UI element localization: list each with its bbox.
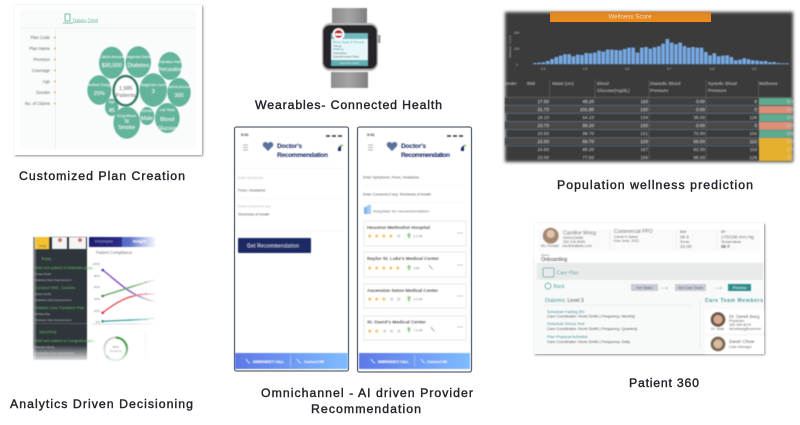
left task sidebar: Grace Smith (35, 272, 51, 276)
histogram: 0.9 (752, 67, 757, 71)
histogram (508, 31, 787, 71)
patient header: Score (680, 240, 689, 244)
top tabs (52, 237, 155, 249)
data table (505, 79, 794, 161)
bubble chart: 1,985 (119, 86, 133, 92)
app header (368, 142, 466, 159)
data table: 88.00 (694, 155, 705, 160)
bubble chart: Smoke (118, 125, 135, 131)
care team members: Physician (729, 319, 744, 323)
status bar: 9:41 (241, 133, 249, 137)
bubble chart: N (125, 119, 129, 125)
patient compliance line chart: 80% (94, 274, 100, 278)
data table: 101.80 (580, 107, 594, 112)
watch screen: Walking (333, 47, 344, 51)
left task sidebar: Congestive Care Improvement (35, 351, 74, 355)
footer call bar (359, 353, 470, 369)
bubble chart: Claims Amount (167, 85, 191, 89)
status bar: 9:41 (367, 133, 375, 137)
care team members: derekbarg@carenet (729, 327, 761, 331)
filter list: Age (43, 79, 51, 84)
data table: 62.00 (694, 147, 705, 152)
hospital card: Houston Methodist: Houston Methodist Hospital (367, 225, 430, 231)
hospital card: St. David's: 7.4 Mi (414, 328, 422, 332)
care team members: Sarah Chow (729, 339, 755, 344)
back button and steps: ---> (715, 286, 722, 290)
left task sidebar: Visit new patient in Congestive pro... (35, 339, 96, 343)
watch strap (331, 8, 368, 88)
data table: 86.20 (582, 147, 594, 152)
patient header (538, 228, 760, 252)
patient header: caroline@abc.com (562, 244, 592, 248)
data table: 0.00 (696, 123, 705, 128)
bubble chart: Precaution (157, 67, 183, 73)
symptom form: Enter Symptoms (238, 176, 263, 180)
icon: cohort (63, 14, 73, 23)
watch screen: View Reminder (339, 61, 360, 65)
histogram: 0 (516, 63, 518, 67)
symptom form: Enter Concerns if any (238, 204, 271, 208)
patient header: 24.00 (680, 244, 692, 249)
data table: 99.70 (582, 131, 594, 136)
data table: 18.10 (538, 115, 549, 120)
patient compliance line chart: 40% (94, 297, 100, 301)
patient header: BMI (680, 230, 686, 234)
diabetes task list: Schedule Fasting BS (547, 309, 585, 314)
left task sidebar: Caroline Wong (35, 345, 54, 349)
data table: 128 (749, 155, 757, 160)
data table: Pressure (650, 88, 669, 93)
back button and steps: ---> (661, 286, 668, 290)
bubble chart: Gender (141, 109, 154, 113)
data table: ender (505, 81, 517, 86)
patient header: Caroline Wong (563, 230, 596, 236)
bubble chart: Medical Charge (87, 83, 112, 87)
data table: 116 (641, 99, 648, 104)
label: customized plan creation: Customized Plan Creation (19, 169, 185, 183)
bubble chart: 3 (152, 89, 155, 95)
hospital card: Houston Methodist: 2.3 Mi (414, 234, 422, 238)
left task sidebar (33, 237, 96, 360)
app header: Recommendation (277, 152, 328, 159)
hospital card: St. David's: St. David's Medical Center (367, 320, 426, 326)
data table: 60.00 (694, 139, 705, 144)
back button and steps: Preview (733, 286, 747, 290)
label: omnichannel provider recommendation: Recommendation (311, 402, 421, 416)
data table: Diastolic Blood (650, 81, 681, 86)
status bar (367, 133, 463, 137)
data table: 77.50 (582, 155, 594, 160)
footer call bar (235, 353, 348, 369)
data table: 89.70 (582, 139, 594, 144)
watch screen (331, 28, 368, 66)
histogram: Wellness - Count (508, 35, 512, 58)
bubble chart: Medication Name (156, 60, 184, 64)
data table: 0.00 (696, 107, 705, 112)
app header: Doctor's (277, 143, 302, 150)
filter list: Plan Code (30, 35, 51, 40)
status onboarding: Onboarding (541, 257, 567, 263)
bubble chart: Claims Amount (100, 55, 124, 59)
bubble chart: Male (141, 116, 153, 122)
donut gauge (104, 331, 146, 360)
data table: 134 (640, 115, 648, 120)
patient header: 170/100 mm Hg (721, 234, 754, 240)
watch screen: Blood Sugar & Glucose (333, 40, 365, 44)
wellness score banner (550, 12, 711, 22)
app header: Recommendation (401, 152, 450, 159)
data table: Wellness (759, 81, 778, 86)
bubble chart: 300 (174, 93, 184, 99)
left task sidebar: Debbie Ray (35, 312, 51, 316)
data table: 22.50 (538, 139, 549, 144)
data table: Pressure (708, 88, 727, 93)
hospitals heading (364, 205, 429, 214)
back button and steps: Set Care Team (678, 286, 703, 290)
label: wearables: Wearables- Connected Health (255, 98, 442, 112)
button: get recommendation (238, 238, 311, 253)
care team members: Dr. Derek Barg (729, 314, 760, 319)
data table: 88.20 (582, 123, 594, 128)
panel: phone hospital recommendations (358, 127, 472, 372)
left task sidebar: Conduct HRA - Caroline (35, 286, 76, 290)
data table: 112 (750, 139, 757, 144)
hospital card: Baylor St. Luke's: 3 Mi (414, 266, 420, 270)
status onboarding (541, 253, 567, 263)
data table: 23.00 (538, 155, 549, 160)
bubble chart: Patients (116, 93, 136, 99)
symptom form: Fever, Headache (238, 188, 265, 192)
data table: 121 (640, 131, 648, 136)
diabetes task list: Schedule Stress Test (547, 321, 585, 326)
hospital card: Ascension Seton: Ascension Seton Medical Center (367, 288, 438, 294)
filter list: Coverage (32, 68, 51, 73)
donut gauge: 81% (113, 345, 119, 349)
hospital card: Baylor St. Luke's: Baylor St. Luke's Medical Center (367, 256, 439, 262)
left task sidebar: Visit new patient in Diabetes progr... (35, 266, 96, 270)
data table: 167 (640, 147, 648, 152)
care team members: Care Manager (729, 345, 753, 349)
diabetes task list: Plan Physical Activities (547, 334, 588, 339)
patient compliance line chart: 100% (92, 262, 100, 266)
watch body (322, 23, 380, 71)
diabetes task list (543, 298, 700, 350)
label: population wellness prediction: Population wellness prediction (557, 178, 753, 192)
histogram: 0.4 (541, 67, 546, 71)
care team members: Care Team Members (705, 298, 763, 304)
left task sidebar: Diabetes Care Improvement (35, 298, 71, 302)
symptoms summary (363, 176, 466, 202)
care team members: Dr. Male (711, 327, 724, 331)
bubble chart: Age (108, 100, 115, 104)
patient compliance line chart: Patient Compliance (96, 250, 133, 255)
histogram: 0.6 (625, 67, 630, 71)
patient header: 0000123456 (563, 236, 583, 240)
wellness colour cells: 0.6 (787, 107, 794, 112)
status onboarding: Status (541, 253, 550, 257)
data table: 130 (640, 107, 648, 112)
symptoms summary: Enter Symptoms: Fever, Headache (363, 176, 419, 180)
patient header: Carrier's Name (614, 235, 638, 239)
top tabs: Insight (133, 238, 147, 244)
data table: 24.50 (538, 147, 549, 152)
data table: 159 (640, 155, 648, 160)
diabetes task list: Care Coordinator: Kevin Smith | Frequency: Monthly (547, 314, 635, 318)
footer call bar: EMERGENCY CALL (253, 360, 284, 364)
data table: Systolic Blood (708, 81, 737, 86)
left task sidebar: Today (41, 257, 51, 261)
data table: Blood (597, 81, 609, 86)
left task sidebar: Upcoming (39, 330, 56, 334)
bubble chart: 20% (94, 91, 105, 97)
data table: 0 (754, 99, 757, 104)
bubble chart: $30,000 (102, 63, 122, 69)
wellness colour cells: 0.6 (787, 115, 794, 120)
watch screen: Inspiration (333, 51, 347, 55)
data table: Glucose(mg/dL) (597, 88, 630, 93)
wellness colour cells: 0.4 (787, 99, 794, 104)
data table: Waist (cm) (552, 81, 574, 86)
footer call bar: Connect HR (304, 360, 325, 364)
hospital card: Baylor St. Luke's: ★ ★ ★ ★ ★ (367, 265, 401, 272)
data table: 0 (754, 123, 757, 128)
data table: 38.00 (694, 115, 705, 120)
care team members: 330 345 8076 (729, 323, 751, 327)
filter list: No. of Claims (25, 101, 50, 106)
patient compliance line chart: 20% (94, 309, 100, 313)
filter list: Premium (33, 57, 50, 62)
bubble chart: Drug Abuse (117, 114, 136, 118)
patient compliance line chart (92, 250, 155, 324)
bubble chart: Diabetes (127, 63, 149, 69)
label: omnichannel provider recommendation (261, 386, 473, 416)
data table: BMI (527, 81, 535, 86)
back button and steps: Set Tasks (636, 286, 653, 290)
data table: 104 (749, 131, 757, 136)
wellness score banner: Wellness Score (608, 14, 652, 20)
patient header: 26.5 (680, 234, 689, 240)
patient header: Commercial PPO (614, 229, 653, 235)
filter list (25, 35, 56, 106)
symptom form: Shortness of breath (238, 212, 269, 216)
label: patient 360: Patient 360 (629, 376, 699, 390)
data table: 70.00 (694, 131, 705, 136)
cohort heading: Diabetes Cohort (73, 19, 98, 25)
hospitals heading: Hospitals for recommendation (373, 210, 429, 214)
left task sidebar: Diabetes Care Improvement (35, 318, 71, 322)
bubble chart: 45 (109, 108, 115, 114)
hospital card: St. David's: ★ ★ (367, 328, 379, 335)
care plan bar (537, 263, 763, 280)
back button and steps (545, 283, 751, 291)
label: omnichannel provider recommendation: Omnichannel - AI driven Provider (261, 386, 473, 400)
hospital card: St. David's (364, 316, 466, 340)
diabetes task list: Care Coordinator: Kevin Smith | Frequency: Quarterly (547, 327, 637, 331)
patient header: Due June, 2021 (614, 239, 639, 243)
back button and steps: Back (554, 284, 565, 290)
data table: 31.70 (538, 107, 549, 112)
watch screen: 74/mg (333, 44, 342, 48)
left task sidebar: Diabetic Care Transition Plan (35, 306, 84, 310)
data table: 116 (750, 147, 757, 152)
symptoms summary: Enter Concerns if any: Shortness of breath (363, 192, 431, 196)
histogram: 0.5 (583, 67, 588, 71)
data table: 128 (749, 115, 757, 120)
top tabs: Employee (95, 238, 114, 244)
panel: patient 360 care plan (534, 223, 765, 355)
data table: 64.10 (582, 115, 594, 120)
care team members (705, 298, 764, 354)
patient compliance line chart: 60% (94, 285, 100, 289)
histogram: 200 (514, 31, 520, 35)
data table: 0 (754, 107, 757, 112)
status bar (241, 133, 342, 137)
wellness colour cells: 0.6 (787, 139, 794, 144)
app header (243, 142, 343, 159)
data table: 129 (640, 139, 648, 144)
patient header: BP (721, 230, 726, 234)
hospital card: Houston Methodist: ★ ★ ★ ★ (367, 233, 394, 240)
patient header: 65, Female (541, 244, 559, 248)
left task sidebar: Diabetes Care Improvement (35, 278, 71, 282)
hospital card: Ascension Seton: ★ ★ (389, 296, 401, 303)
bubble chart (87, 46, 191, 139)
patient header: 330 234 8045 (563, 240, 585, 244)
wellness colour cells: 0.7 (787, 147, 794, 152)
filter list: Gender (36, 90, 51, 95)
hospital card: Houston Methodist: ★ (396, 233, 401, 240)
watch screen: Questionnaire Data (333, 54, 359, 58)
histogram: 0.7 (667, 67, 672, 71)
wellness colour cells: 0.6 (787, 123, 794, 128)
patient header: Temperature (721, 240, 741, 244)
bubble chart: Glucose (157, 126, 177, 132)
panel: customized plan creation screenshot (14, 5, 203, 156)
patient header: 98 F (721, 244, 730, 249)
data table: 23.70 (538, 123, 549, 128)
data table: 23.50 (538, 131, 549, 136)
hospital card: St. David's: ★ ★ ★ (382, 328, 401, 335)
donut gauge: Smoking (110, 349, 122, 353)
data table: 0.00 (696, 99, 705, 104)
app header: Doctor's (401, 143, 426, 150)
footer call bar: EMERGENCY CALL (378, 360, 409, 364)
patient compliance line chart: 0% (96, 320, 100, 324)
bubble chart: Diagnosis count (141, 83, 166, 87)
panel: population wellness prediction dashboard (505, 12, 794, 162)
bubble chart: Diagnosis Name (125, 55, 151, 59)
panel: analytics dashboard (30, 233, 160, 363)
filter list: Plan Name (29, 46, 51, 51)
footer call bar: Connect HR (427, 360, 448, 364)
wellness colour cells: 0.5 (787, 131, 794, 136)
histogram: 0.8 (710, 67, 715, 71)
data table: 48.20 (582, 99, 594, 104)
hospital card: Ascension Seton: ★ ★ ★ (367, 296, 386, 303)
label: analytics driven decisioning: Analytics Driven Decisioning (10, 397, 193, 411)
hospital card: Ascension Seton: 4.3 Mi (414, 298, 422, 302)
left task sidebar: Grace Smith (35, 292, 51, 296)
wellness colour cells: 0.7 (787, 155, 794, 160)
data table: 130 (640, 123, 648, 128)
left task sidebar: Today (39, 244, 47, 248)
histogram: 100 (514, 47, 520, 51)
care plan bar: Care Plan (556, 270, 579, 276)
bubble chart: Lab Tests (160, 108, 175, 112)
wellness colour cells (759, 98, 794, 161)
symptom form (238, 168, 344, 231)
data table: 17.50 (538, 99, 549, 104)
hospital card: Ascension Seton (364, 284, 466, 308)
button: get recommendation: Get Recommendation (247, 244, 299, 250)
icon: smartwatch (322, 8, 380, 88)
panel: phone doctor's recommendation form (234, 127, 348, 371)
bubble chart: Blood (160, 117, 174, 123)
diabetes task list: Diabetes: Level 3 (545, 298, 584, 304)
diabetes task list: Care Coordinator: Kevin Smith | Frequency: Daily (547, 340, 630, 344)
hospital card: Houston Methodist (364, 221, 466, 246)
hospital card: Baylor St. Luke's (364, 252, 466, 277)
